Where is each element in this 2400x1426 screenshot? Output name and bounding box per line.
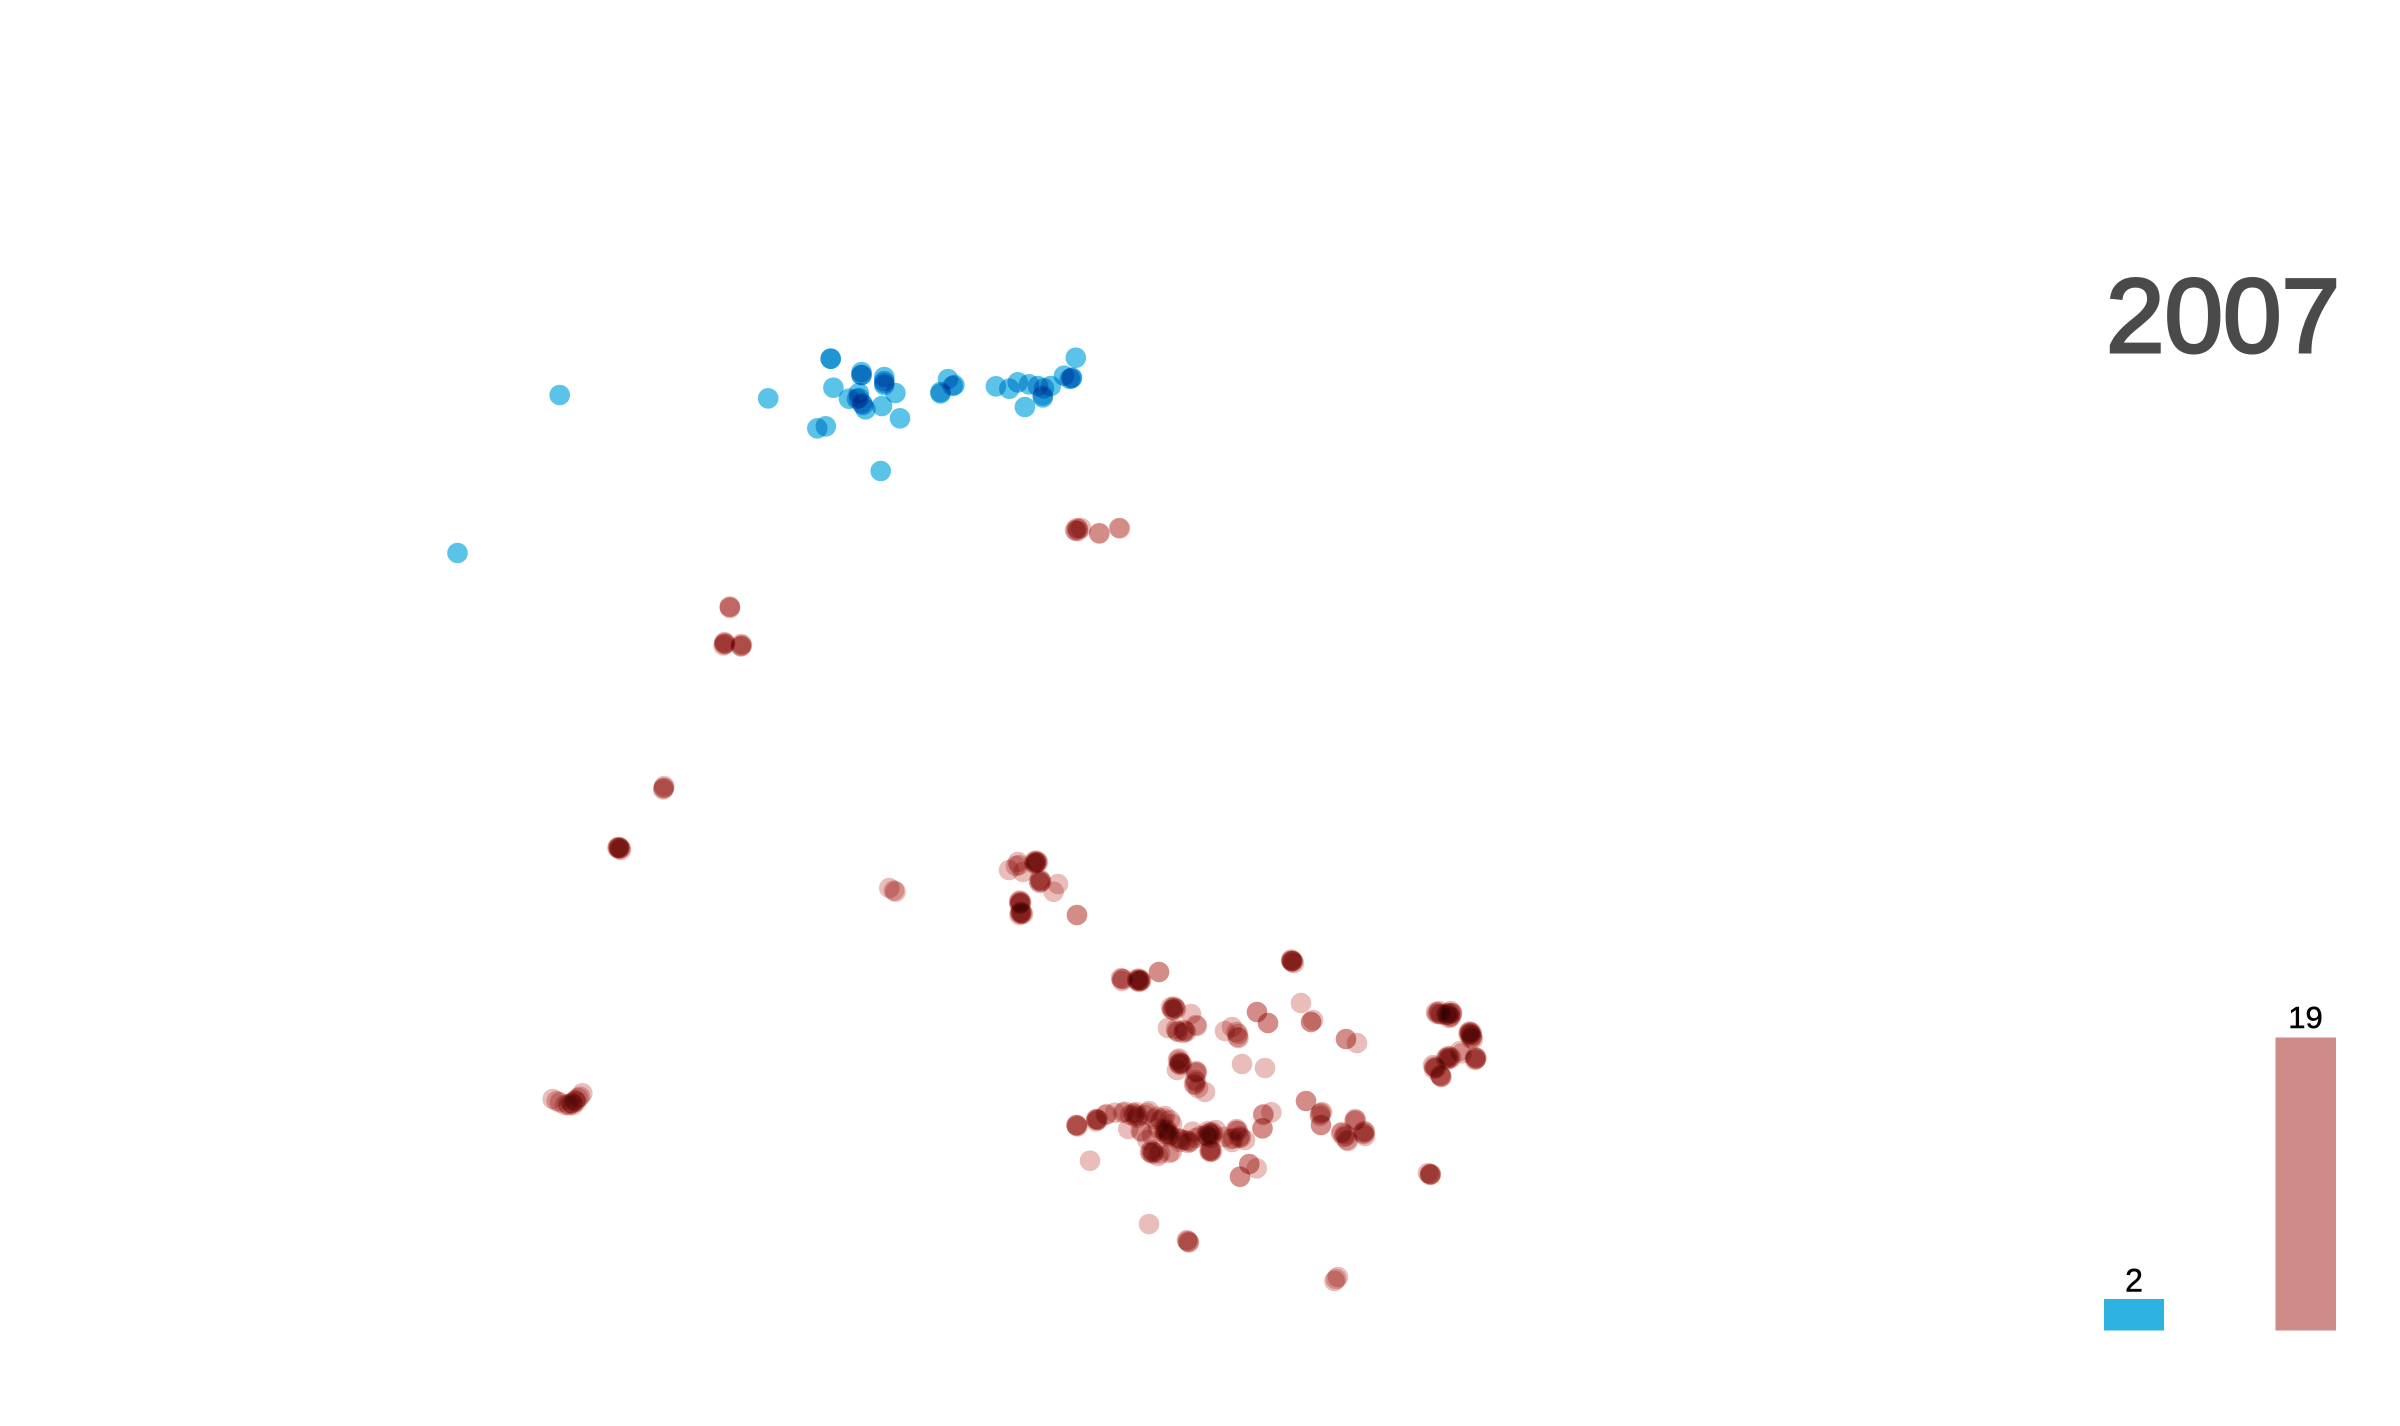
scatter dots: blue group [447,347,1086,563]
label: red count value: 19 [2288,1000,2323,1035]
bar: red count [2276,1038,2336,1330]
scatter dots: red group [542,518,1487,1291]
label: blue count value: 2 [2125,1262,2143,1298]
bar: blue count [2104,1299,2164,1330]
year heading: 2007 [2106,258,2340,375]
